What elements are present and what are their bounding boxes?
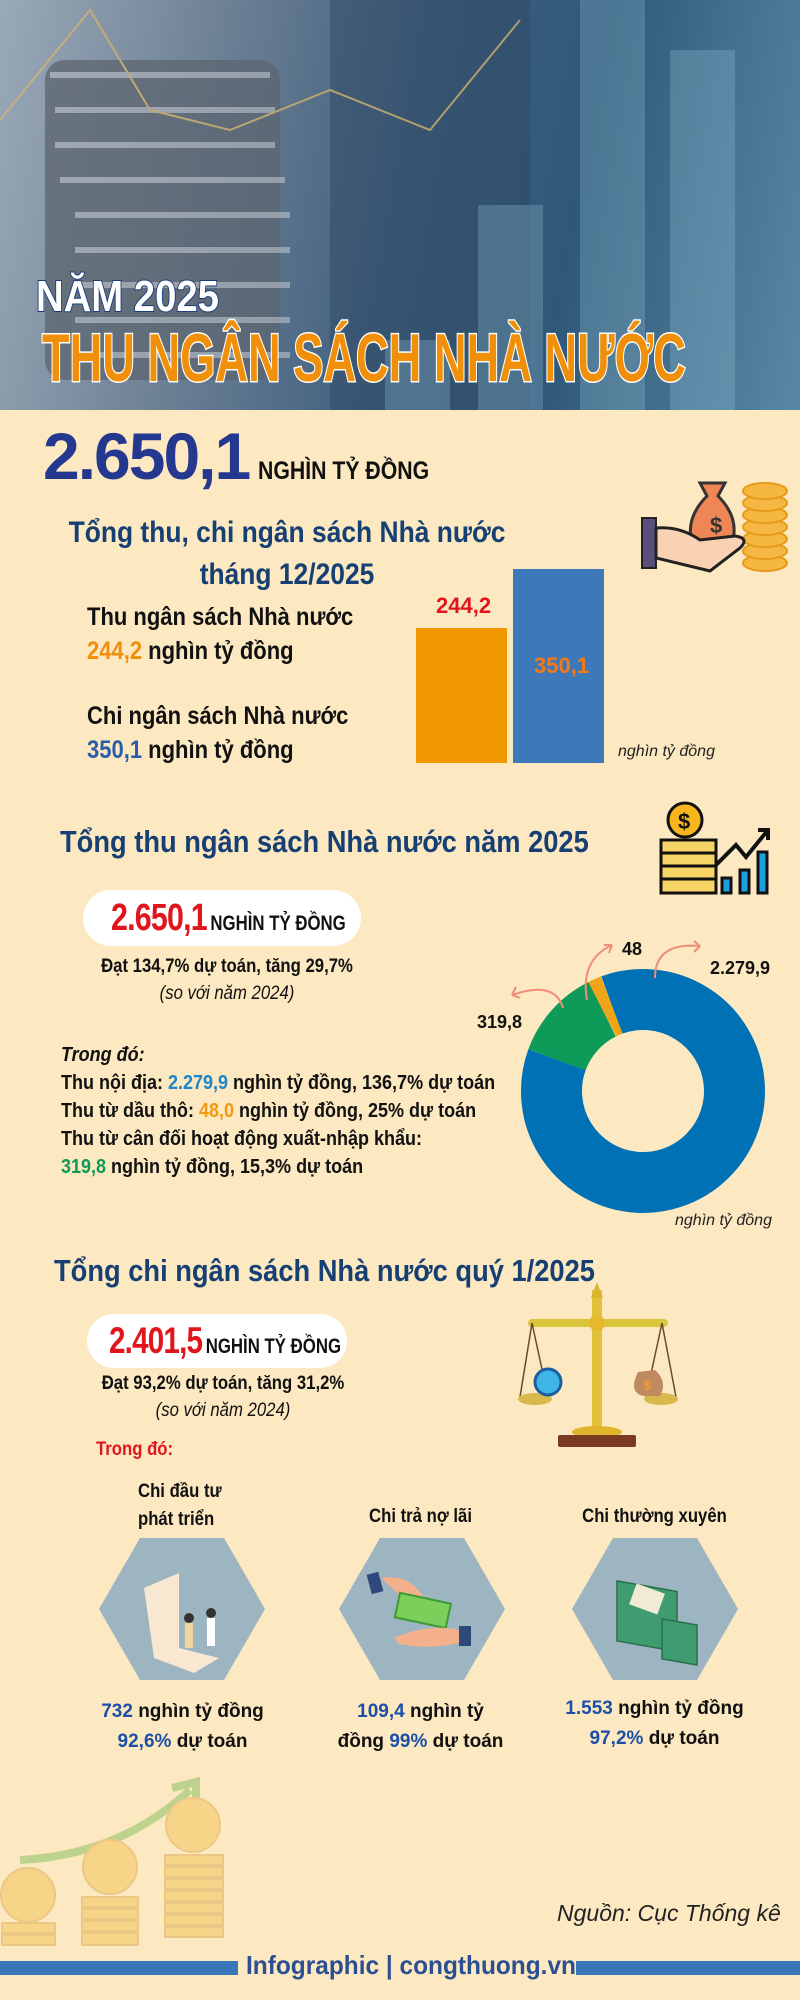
icon: balance scale <box>518 1282 678 1447</box>
text: monthly revenue <box>87 603 353 665</box>
donut chart: revenue structure: 2.279,9 <box>710 958 770 978</box>
donut chart: revenue structure: 319,8 <box>477 1012 522 1032</box>
header banner <box>0 0 800 410</box>
decoration: coin stacks with arrow <box>0 1777 224 1946</box>
bar chart: monthly: nghìn tỷ đồng <box>618 743 715 760</box>
donut chart: revenue structure <box>477 939 772 1229</box>
item: recurrent spending <box>565 1506 744 1749</box>
label: Chi thường xuyên <box>582 1506 727 1527</box>
text: revenue breakdown: Thu nội địa: 2.279,9 nghìn tỷ đồng, 136,7% dự toán <box>61 1072 495 1094</box>
text: revenue breakdown: Thu từ dầu thô: 48,0 nghìn tỷ đồng, 25% dự toán <box>61 1100 476 1122</box>
bar chart: monthly: 350,1 <box>534 653 589 678</box>
value <box>565 1698 744 1749</box>
icon: balance scale: $ <box>644 1378 652 1393</box>
value <box>101 1701 264 1752</box>
text: revenue breakdown: Thu từ cân đối hoạt động xuất-nhập khẩu: <box>61 1128 422 1150</box>
donut chart: revenue structure: nghìn tỷ đồng <box>675 1212 772 1229</box>
bar chart: monthly: 244,2 <box>436 593 491 618</box>
big total <box>43 419 429 493</box>
text: spending growth <box>102 1373 344 1421</box>
value: 1.553 nghìn tỷ đồng <box>565 1698 744 1719</box>
footer <box>0 1950 800 1980</box>
text: revenue breakdown: 319,8 nghìn tỷ đồng, 15,3% dự toán <box>61 1156 363 1178</box>
icon: money bag in hand <box>641 482 788 573</box>
text: annual revenue growth: (so với năm 2024) <box>160 983 294 1004</box>
heading: monthly: tháng 12/2025 <box>200 558 374 591</box>
text: revenue breakdown: Trong đó: <box>61 1044 145 1066</box>
pill: annual revenue total: 2.650,1 NGHÌN TỶ ĐỒNG <box>111 897 346 939</box>
label: Chi đầu tư <box>138 1481 222 1502</box>
value: đồng 99% dự toán <box>338 1731 503 1752</box>
source note: Nguồn: Cục Thống kê <box>557 1900 781 1926</box>
pill: spending total <box>87 1314 347 1368</box>
value: 109,4 nghìn tỷ <box>357 1701 484 1722</box>
icon: coins and growth chart: $ <box>678 809 690 834</box>
title: NĂM 2025: NĂM 2025 <box>36 272 219 321</box>
value: 97,2% dự toán <box>590 1728 719 1749</box>
icon: hexagon money stack <box>572 1538 738 1680</box>
label <box>138 1481 222 1530</box>
footer: Infographic | congthuong.vn <box>246 1950 576 1980</box>
icon: coins and growth chart <box>660 802 770 894</box>
text: monthly revenue: Thu ngân sách Nhà nước <box>87 603 353 631</box>
text: monthly spending <box>87 702 348 764</box>
text: annual revenue growth <box>101 956 353 1004</box>
heading: monthly: Tổng thu, chi ngân sách Nhà nước <box>69 516 505 549</box>
text: annual revenue growth: Đạt 134,7% dự toán, tăng 29,7% <box>101 956 353 977</box>
text: spending growth: Đạt 93,2% dự toán, tăng 31,2% <box>102 1373 344 1394</box>
text: revenue breakdown <box>61 1044 495 1178</box>
pill: annual revenue total <box>83 890 361 946</box>
icon: hexagon money exchange <box>339 1538 505 1680</box>
value: 92,6% dự toán <box>118 1731 247 1752</box>
text: monthly spending: 350,1 nghìn tỷ đồng <box>87 736 294 764</box>
value: 732 nghìn tỷ đồng <box>101 1701 264 1722</box>
big total: 2.650,1 <box>43 419 249 493</box>
label: phát triển <box>138 1509 214 1530</box>
text: monthly revenue: 244,2 nghìn tỷ đồng <box>87 637 294 665</box>
title: THU NGÂN SÁCH NHÀ NƯỚC: THU NGÂN SÁCH NHÀ NƯỚC <box>42 320 686 396</box>
value <box>338 1701 503 1752</box>
donut chart: revenue structure: 48 <box>622 939 642 959</box>
heading: monthly <box>68 516 505 591</box>
item: interest payment <box>338 1506 505 1752</box>
heading: annual revenue: Tổng thu ngân sách Nhà nước năm 2025 <box>60 824 589 859</box>
item: development investment <box>99 1481 265 1752</box>
big total: NGHÌN TỶ ĐỒNG <box>258 457 429 485</box>
icon: hexagon document <box>99 1538 265 1680</box>
heading: spending Q1: Tổng chi ngân sách Nhà nước quý 1/2025 <box>54 1253 595 1288</box>
text: monthly spending: Chi ngân sách Nhà nước <box>87 702 348 730</box>
icon: money bag in hand: $ <box>710 513 722 538</box>
text: spending growth: (so với năm 2024) <box>156 1400 290 1421</box>
label: Trong đó (spending): Trong đó: <box>96 1439 173 1460</box>
label: Chi trả nợ lãi <box>369 1506 472 1527</box>
bar chart: monthly <box>416 569 715 763</box>
pill: spending total: 2.401,5 NGHÌN TỶ ĐỒNG <box>109 1320 341 1361</box>
